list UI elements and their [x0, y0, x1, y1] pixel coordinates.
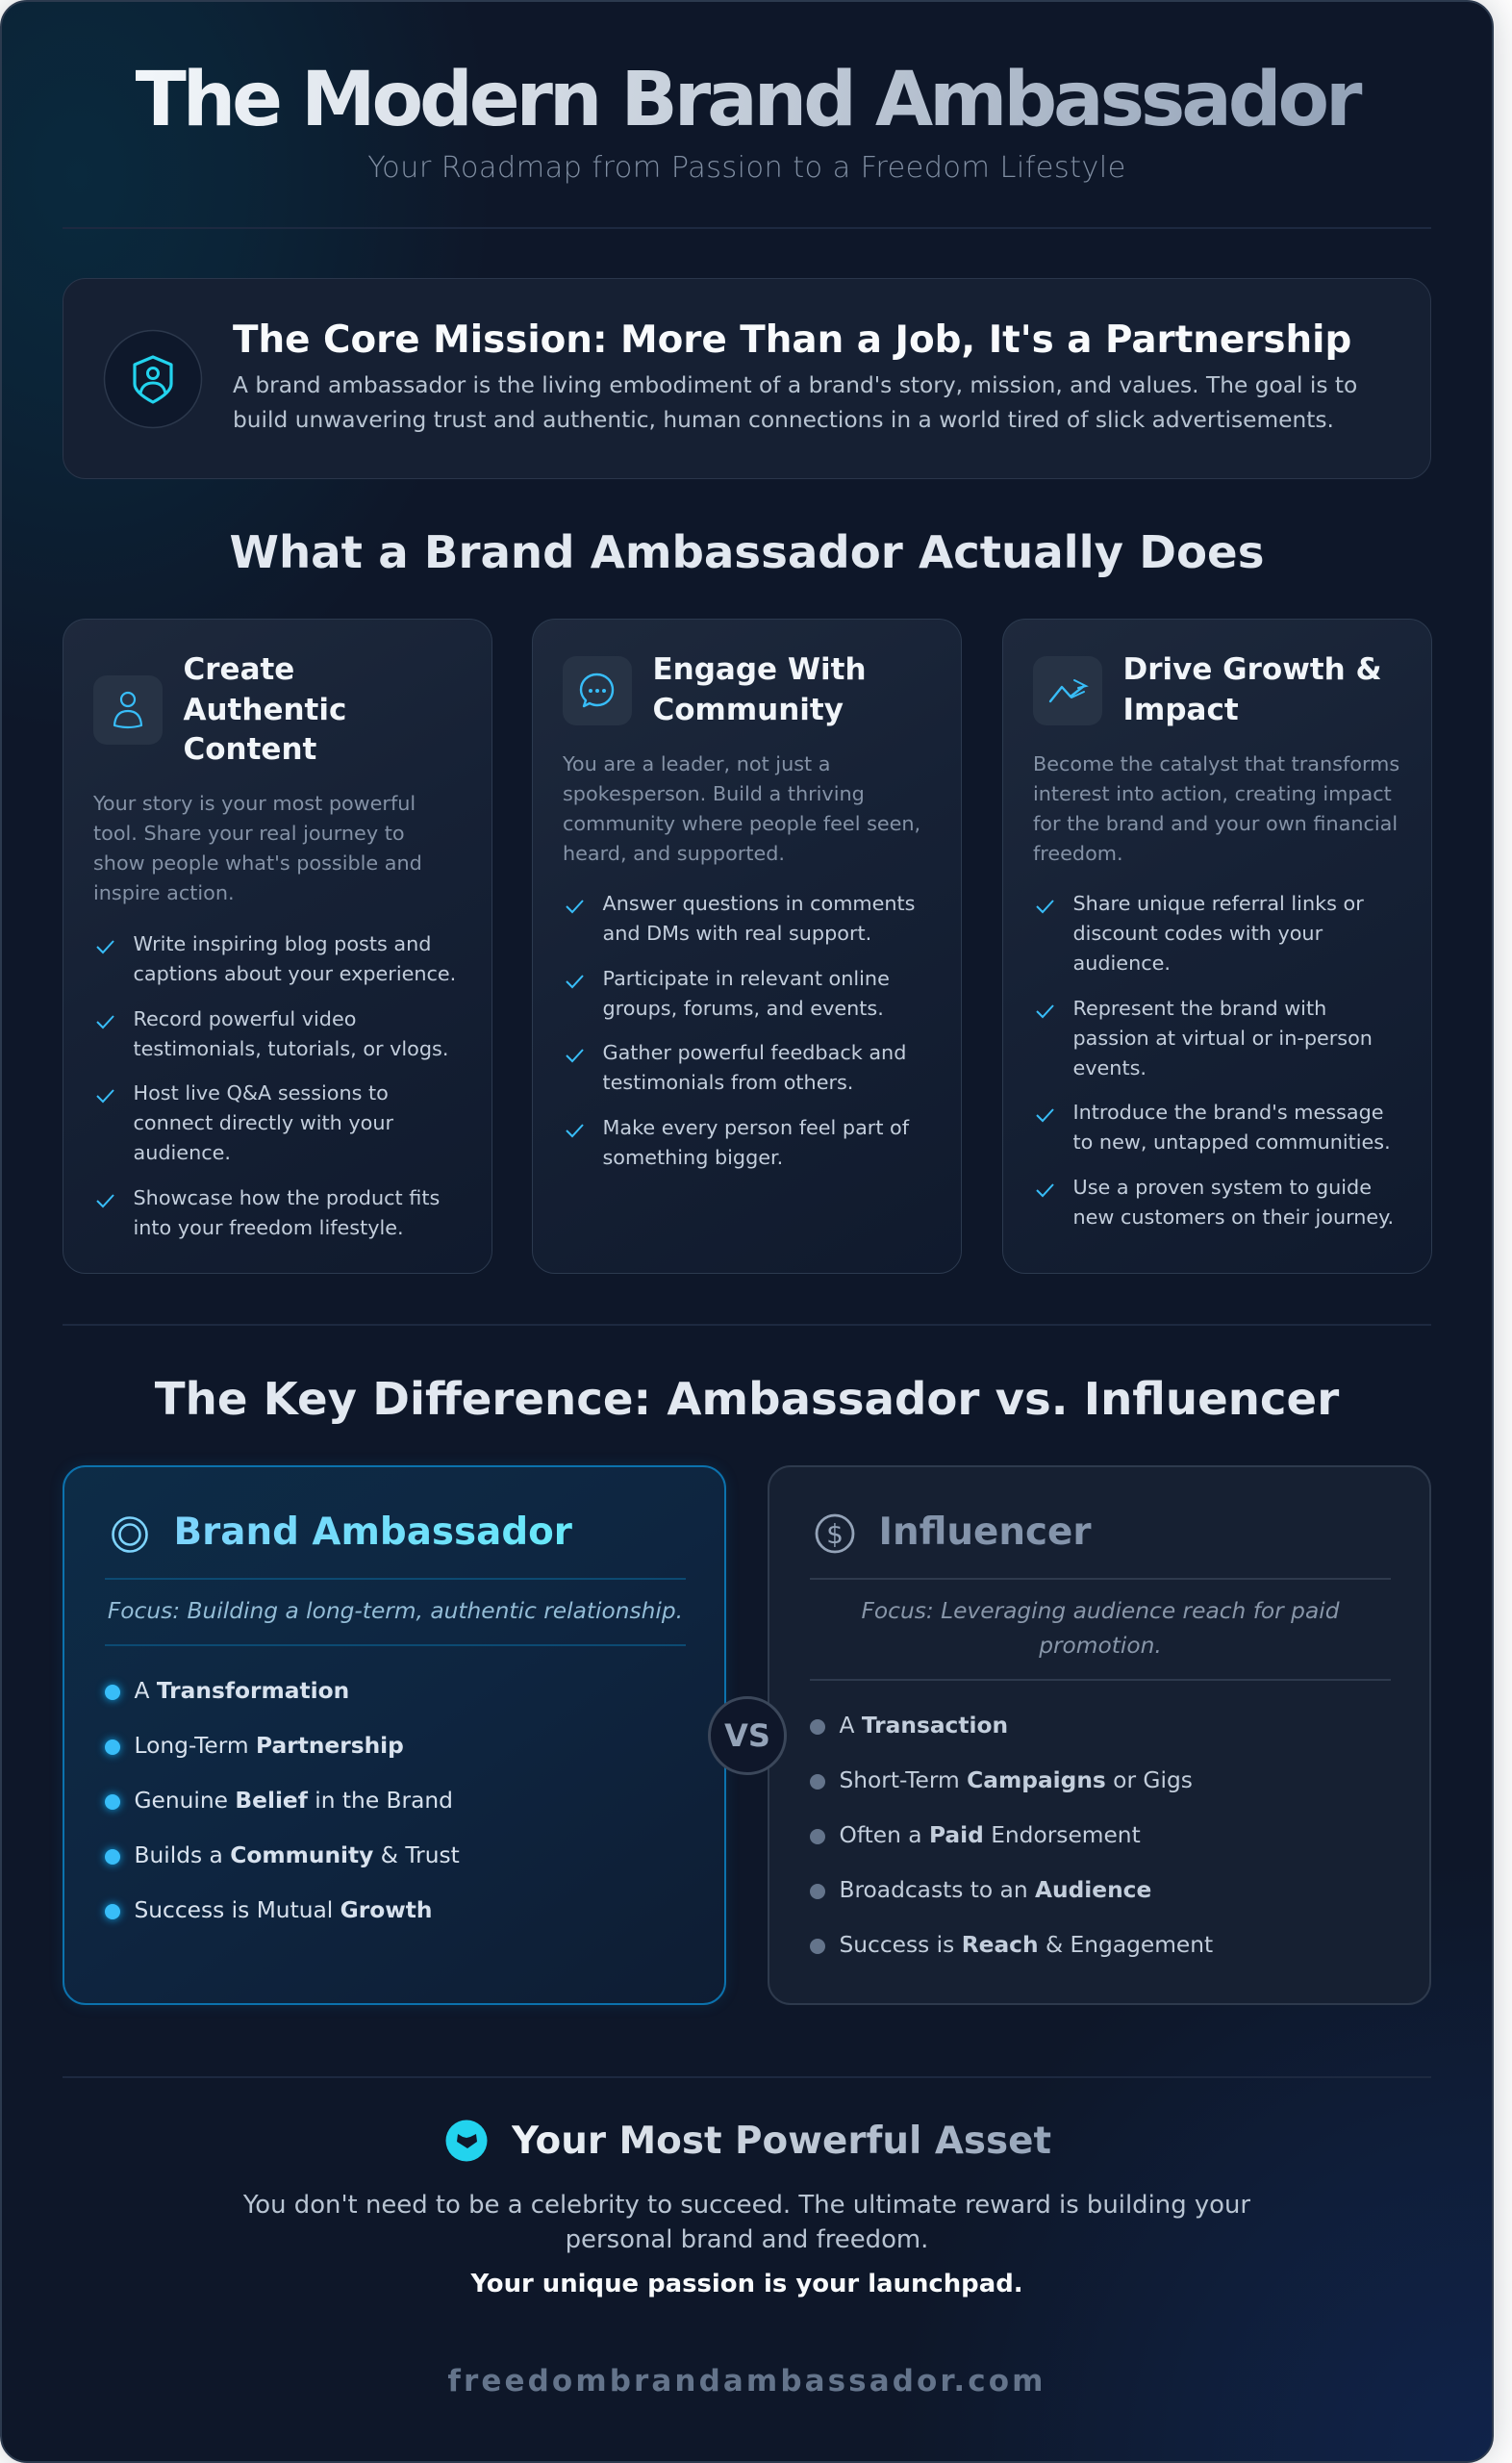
card header: Authentic: [183, 693, 346, 727]
card text: heard, and supported.: [563, 842, 785, 865]
checklist: into your freedom lifestyle.: [133, 1216, 404, 1239]
card header: Content: [183, 732, 316, 767]
mission heading: The Core Mission: More Than a Job, It's a Partnership: [233, 318, 1351, 362]
card text: for the brand and your own financial: [1033, 812, 1398, 835]
checklist: audience.: [133, 1141, 231, 1164]
checklist: to new, untapped communities.: [1073, 1130, 1391, 1154]
comparison list: [99, 1678, 460, 1925]
footer heading: Your Most Powerful Asset: [512, 2120, 1051, 2163]
card text: tool. Share your real journey to: [93, 822, 405, 845]
card text: You are a leader, not just a: [563, 752, 830, 775]
icon: shield with person: [104, 329, 202, 429]
mission text: build unwavering trust and authentic, human connections in a world tired of slick advertisements.: [233, 406, 1334, 433]
footer text: personal brand and freedom.: [566, 2224, 928, 2253]
card header: Drive Growth &: [1123, 652, 1382, 687]
comparison list: Often a Paid Endorsement: [839, 1822, 1141, 1847]
comparison list: Builds a Community & Trust: [135, 1841, 460, 1868]
checklist: Gather powerful feedback and: [602, 1041, 906, 1064]
checklist: Answer questions in comments: [602, 892, 915, 915]
checklist: [96, 932, 456, 1239]
card text: Become the catalyst that transforms: [1033, 752, 1399, 775]
focus statement: Focus: Building a long-term, authentic relationship.: [108, 1598, 683, 1624]
icon: fox badge: [446, 2120, 487, 2161]
card text: [1033, 752, 1399, 865]
mission text: A brand ambassador is the living embodiment of a brand's story, mission, and values. The goal is to: [233, 371, 1357, 398]
comparison list: Success is Reach & Engagement: [839, 1932, 1213, 1957]
checklist: testimonials from others.: [602, 1071, 853, 1094]
checklist: audience.: [1073, 952, 1171, 975]
comparison list: Long-Term Partnership: [135, 1732, 404, 1759]
card text: spokesperson. Build a thriving: [563, 782, 865, 805]
card text: Your story is your most powerful: [93, 792, 416, 815]
card header: Community: [652, 693, 844, 727]
card text: community where people feel seen,: [563, 812, 920, 835]
section heading: what ambassadors do: What a Brand Ambassador Actually Does: [230, 527, 1264, 579]
icon: user: [93, 675, 163, 745]
VS badge: [708, 1696, 787, 1775]
panel: drive growth and impact: [1002, 619, 1432, 1274]
checklist: [566, 892, 915, 1169]
checklist: captions about your experience.: [133, 962, 456, 985]
card text: [563, 752, 920, 865]
checklist: Represent the brand with: [1073, 997, 1326, 1020]
comparison list: [810, 1713, 1213, 1957]
card header: Impact: [1123, 693, 1239, 727]
card header: [1033, 652, 1382, 727]
VS badge: VS: [724, 1717, 770, 1754]
checklist: connect directly with your: [133, 1111, 393, 1134]
card text: freedom.: [1033, 842, 1123, 865]
checklist: Introduce the brand's message: [1073, 1101, 1384, 1124]
comparison list: A Transaction: [839, 1713, 1008, 1738]
footer text: You don't need to be a celebrity to succeed. The ultimate reward is building your: [243, 2190, 1250, 2219]
checklist: and DMs with real support.: [602, 922, 871, 945]
checklist: Write inspiring blog posts and: [133, 932, 431, 955]
section heading: key difference: The Key Difference: Ambassador vs. Influencer: [155, 1374, 1339, 1426]
panel: core mission: [63, 278, 1431, 479]
panel: brand ambassador: [63, 1465, 726, 2005]
checklist: events.: [1073, 1056, 1147, 1079]
checklist: groups, forums, and events.: [602, 997, 884, 1020]
heading: Brand Ambassador: [173, 1511, 572, 1554]
icon: chat bubble: [563, 656, 632, 725]
icon: trend arrow: [1033, 656, 1102, 725]
checklist: Host live Q&A sessions to: [133, 1081, 389, 1105]
footer text: [242, 2190, 1250, 2253]
panel: influencer: [768, 1465, 1431, 2005]
checklist: testimonials, tutorials, or vlogs.: [133, 1037, 448, 1060]
comparison list: Broadcasts to an Audience: [839, 1876, 1151, 1903]
checklist: something bigger.: [602, 1146, 783, 1169]
checklist: [1036, 892, 1394, 1229]
card text: inspire action.: [93, 881, 235, 904]
comparison list: Genuine Belief in the Brand: [135, 1788, 453, 1813]
subtitle: Your Roadmap from Passion to a Freedom Lifestyle: [367, 150, 1126, 185]
focus statement: [861, 1598, 1340, 1659]
icon: target rings: [112, 1516, 148, 1553]
checklist: Share unique referral links or: [1073, 892, 1364, 915]
checklist: Showcase how the product fits: [133, 1186, 440, 1209]
mission text: [233, 371, 1357, 433]
panel: create authentic content: [63, 619, 492, 1274]
checklist: Record powerful video: [133, 1007, 356, 1030]
focus statement: Focus: Leveraging audience reach for paid: [861, 1598, 1339, 1624]
card header: [93, 652, 346, 767]
card text: show people what's possible and: [93, 851, 422, 875]
icon: dollar coin: $: [826, 1518, 843, 1550]
footer callout: Your unique passion is your launchpad.: [470, 2270, 1023, 2298]
panel: engage with community: [532, 619, 962, 1274]
card header: Create: [183, 652, 294, 687]
checklist: passion at virtual or in-person: [1073, 1027, 1373, 1050]
comparison list: A Transformation: [135, 1678, 349, 1703]
comparison list: Success is Mutual Growth: [135, 1897, 433, 1922]
card text: [93, 792, 422, 904]
title: The Modern Brand Ambassador: [136, 57, 1358, 143]
checklist: Make every person feel part of: [602, 1116, 909, 1139]
card header: [563, 652, 867, 727]
checklist: Use a proven system to guide: [1073, 1176, 1372, 1199]
icon: dollar coin: [816, 1514, 854, 1553]
checklist: Participate in relevant online: [602, 967, 890, 990]
website url: freedombrandambassador.com: [447, 2364, 1046, 2399]
checklist: new customers on their journey.: [1073, 1206, 1394, 1229]
comparison list: Short-Term Campaigns or Gigs: [839, 1766, 1193, 1793]
focus statement: promotion.: [1039, 1633, 1162, 1659]
heading: Influencer: [879, 1511, 1091, 1554]
card header: Engage With: [652, 652, 867, 687]
card text: interest into action, creating impact: [1033, 782, 1392, 805]
checklist: discount codes with your: [1073, 922, 1323, 945]
